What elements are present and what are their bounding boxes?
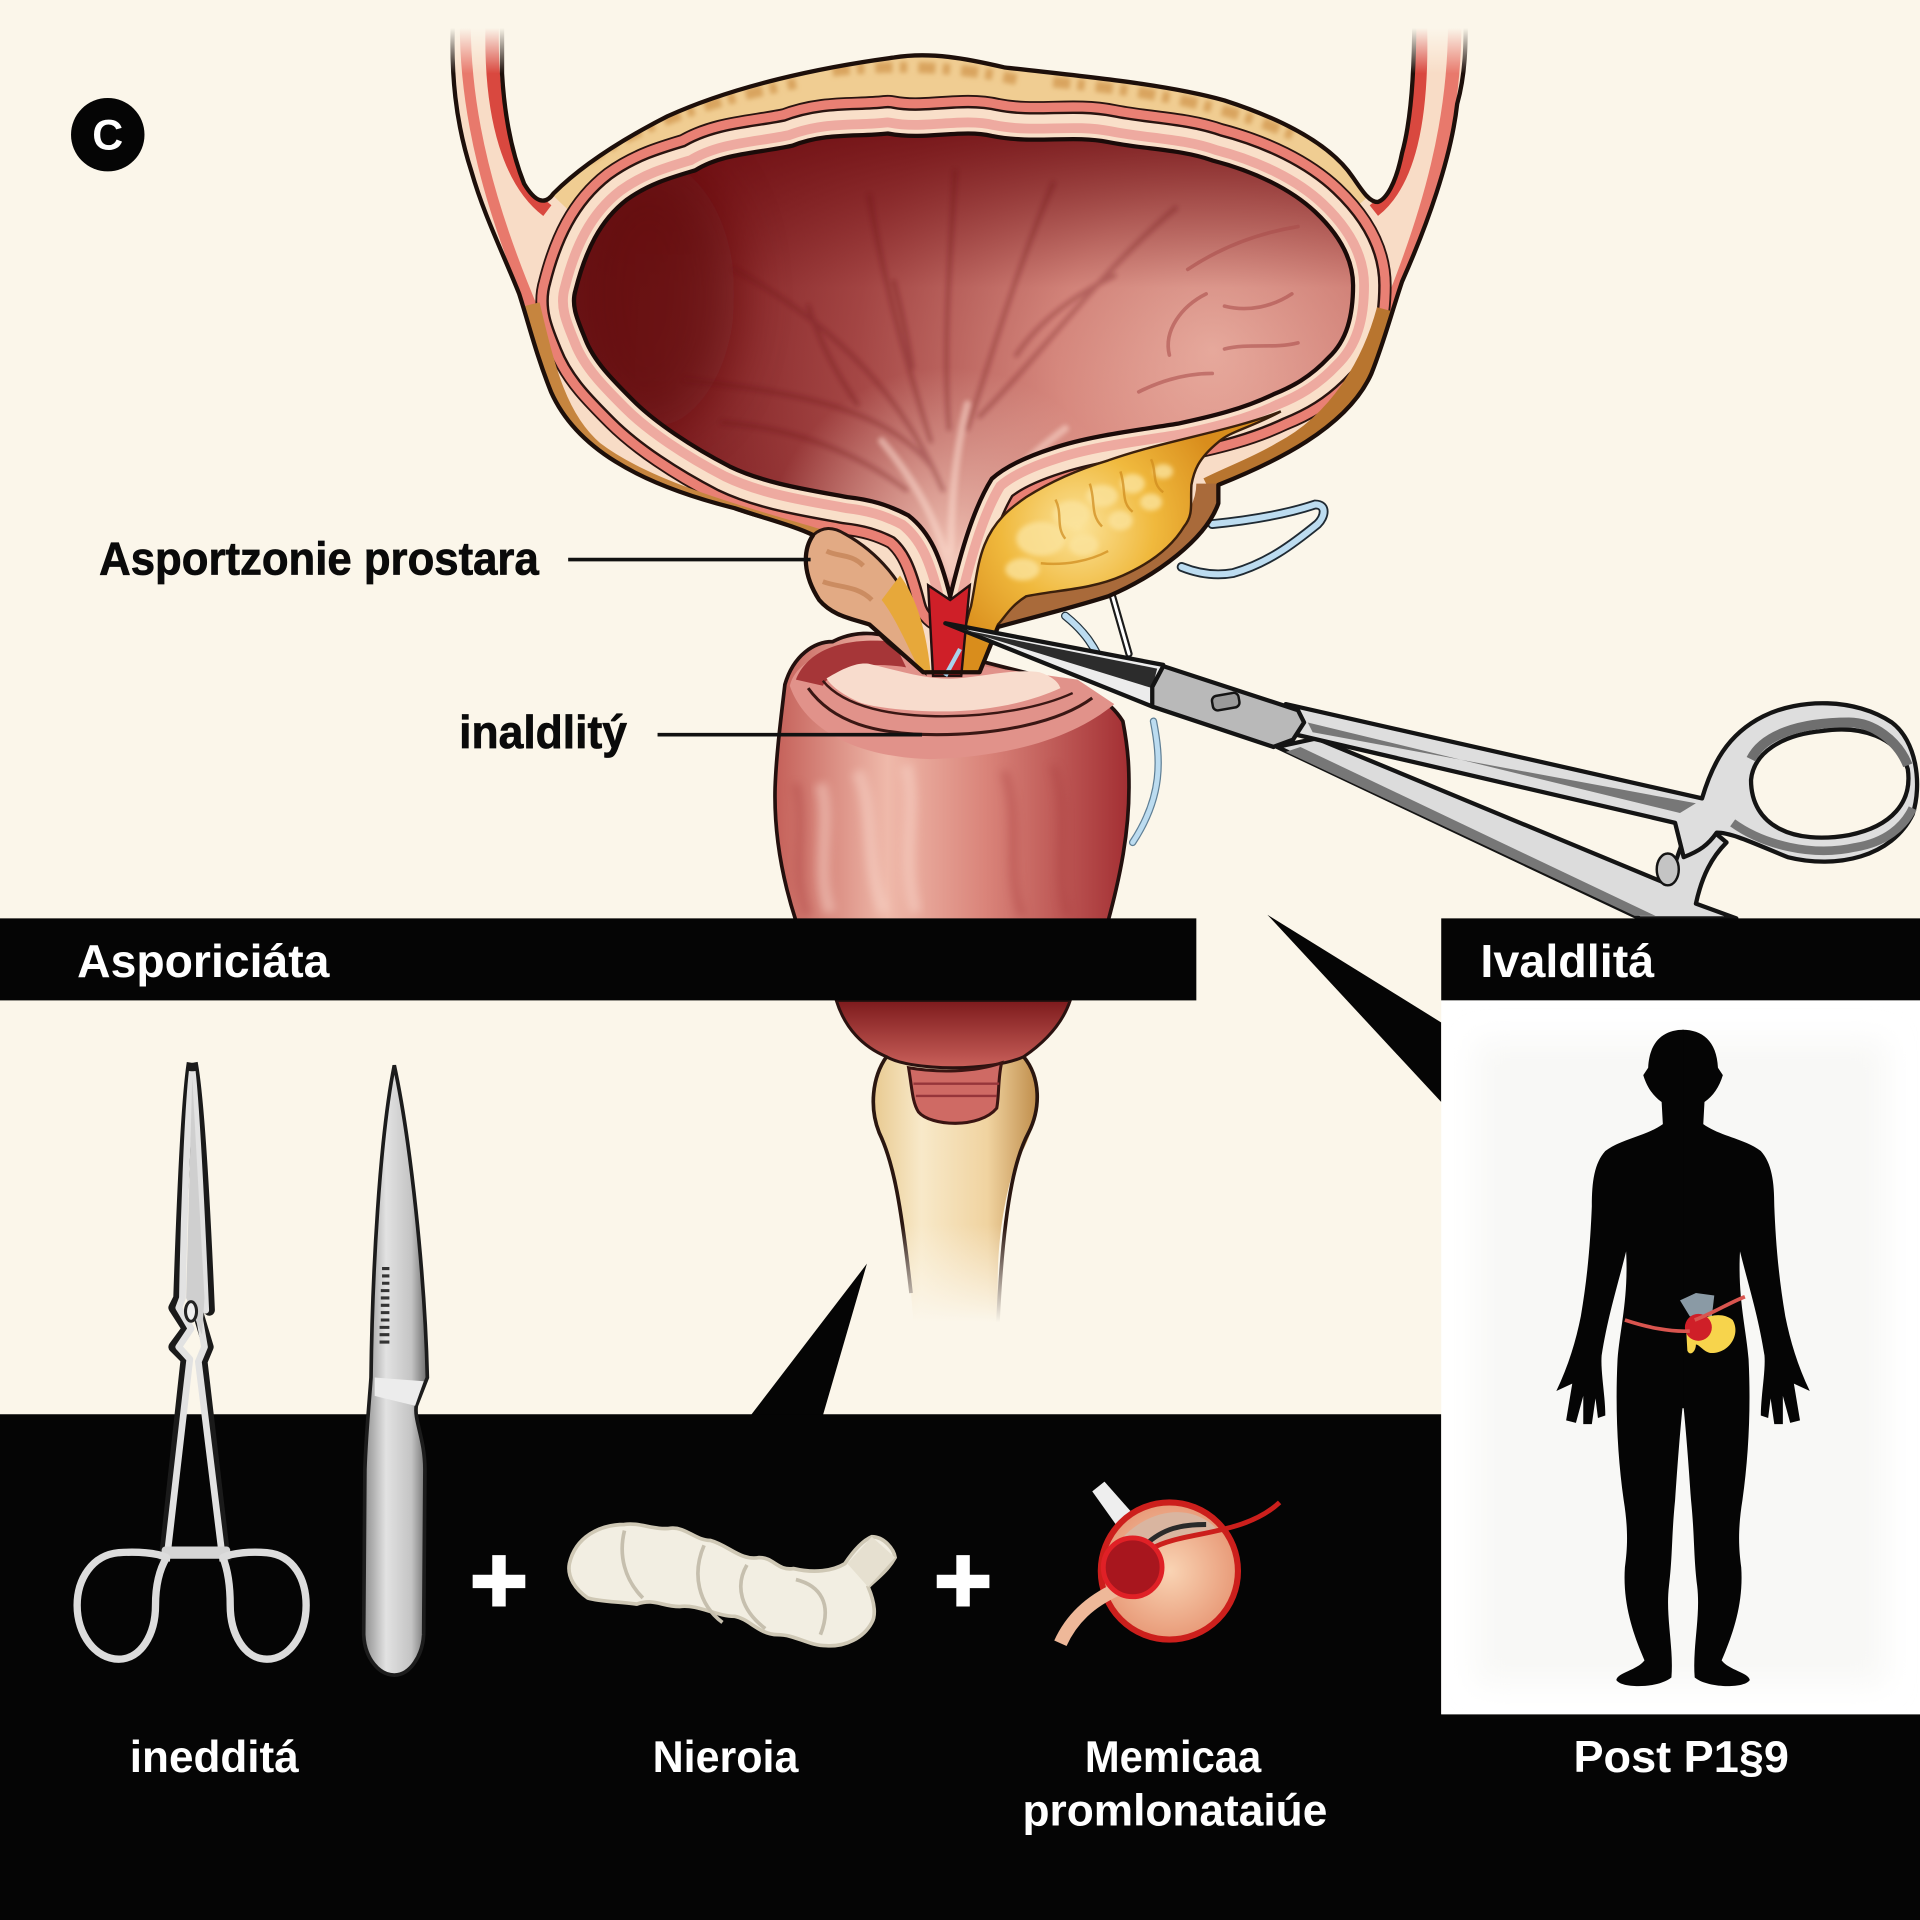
pink organ body beneath the bladder [775,633,1129,921]
caption: Memicaa promlonataiúe: Memicaa [1085,1733,1262,1782]
human silhouette [1556,1030,1810,1686]
top left badge C [71,98,144,171]
bladder wall layers [574,133,1353,596]
tool: scalpel [364,1065,427,1675]
caption: inedditá: inedditá [130,1733,299,1782]
black pointer to right panel [1267,915,1441,1102]
label: inaldlitý: inaldlitý [459,706,627,758]
yellow prostate lobes [958,411,1281,672]
header bar left: Asporiciáta [77,935,331,987]
forceps jaws [945,623,1163,707]
tool: hemostat forceps [77,1063,306,1659]
top left badge C: C [92,111,123,159]
panel: bottom black band [0,1414,1920,1920]
outer wall layers [465,24,1455,324]
urethra [928,585,970,676]
icon: catheter balloon [1060,1482,1280,1643]
bladder outline [452,18,1466,672]
ureter fade [435,0,1482,73]
label: Asportzonie prostara: Asportzonie prostara [99,532,540,584]
upper forceps arm and ring [1286,703,1917,862]
leader line to prostate [568,558,811,561]
lumen shading and folds [577,136,1351,588]
left prostate remnant [806,529,924,672]
highlighted pelvic organs [1625,1293,1745,1353]
suture threads behind prostate [1065,504,1324,842]
leader line to organ [658,733,922,736]
small blue suture at urethra [945,649,960,676]
bladder outer silhouette [452,18,1466,672]
surgical forceps [945,623,1917,918]
panel: right patient: Ivaldlitá [1480,935,1654,987]
plus sign 2 [937,1555,989,1607]
lock nub [1657,853,1679,885]
forceps joint box [1152,666,1304,747]
lower neck of organ below the bar [836,1000,1070,1329]
outer tan and brown wall bands [524,306,1396,631]
icon: gauze roll [569,1524,895,1646]
bladder cross-section [450,30,1468,678]
plus sign 1 [473,1555,525,1607]
caption: Post P1§9: Post P1§9 [1573,1733,1789,1782]
header bar left [0,918,1196,1000]
panel: right patient [1441,918,1920,1714]
caption: Nieroia: Nieroia [653,1733,799,1782]
caption: Memicaa promlonataiúe: promlonataiúe [1022,1787,1327,1836]
bladder lumen [574,133,1353,596]
lower forceps arm [1277,738,1736,918]
black pointer to bottom panel [751,1264,867,1416]
